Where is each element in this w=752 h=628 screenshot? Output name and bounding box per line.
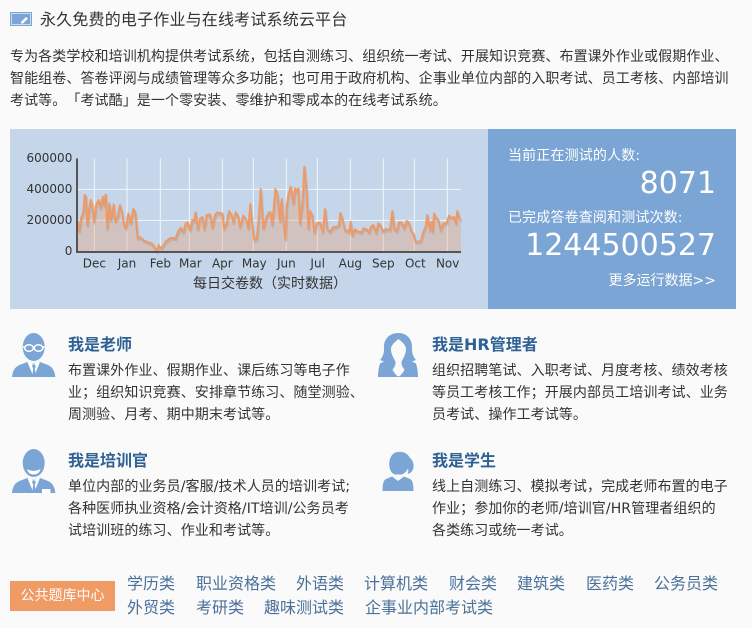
line area chart: May bbox=[242, 257, 267, 271]
category links: 职业资格类 bbox=[196, 574, 276, 593]
line area chart: Jul bbox=[309, 257, 325, 271]
line area chart: 400000 bbox=[27, 182, 72, 196]
button: public question bank: 公共题库中心 bbox=[20, 588, 104, 604]
heading: teacher: 我是老师 bbox=[68, 335, 132, 354]
category links: 外语类 bbox=[296, 574, 344, 593]
text: student description: 作业；参加你的老师/培训官/HR管理者组织的 bbox=[432, 501, 716, 517]
line area chart: 0 bbox=[65, 244, 72, 258]
icon: bearded trainer bbox=[12, 449, 56, 493]
text: trainer description bbox=[68, 478, 350, 539]
text: student description bbox=[432, 478, 728, 539]
line area chart: Mar bbox=[179, 257, 202, 271]
line area chart: Nov bbox=[436, 257, 459, 271]
panel: HR manager bbox=[378, 333, 728, 423]
line area chart: Jan bbox=[117, 257, 136, 271]
line area chart: Sep bbox=[372, 257, 395, 271]
line area chart: Dec bbox=[83, 257, 106, 271]
category links: 公务员类 bbox=[654, 574, 718, 593]
panel: trainer bbox=[12, 449, 350, 539]
panel: teacher bbox=[12, 333, 364, 423]
intro paragraph: 专为各类学校和培训机构提供考试系统，包括自测练习、组织统一考试、开展知识竞赛、布置课外作业或假期作业、 bbox=[10, 49, 729, 65]
heading: student: 我是学生 bbox=[432, 451, 496, 470]
text: teacher description: 布置课外作业、假期作业、课后练习等电子作 bbox=[68, 363, 350, 379]
category links: 医药类 bbox=[586, 574, 634, 593]
number: current testers: 8071 bbox=[640, 166, 716, 201]
text: HR description: 等员工考核工作；开展内部员工培训考试、业务 bbox=[432, 385, 728, 401]
number: completed tests: 1244500527 bbox=[525, 228, 716, 263]
intro paragraph bbox=[10, 48, 729, 109]
button: public question bank bbox=[10, 581, 115, 611]
panel: daily submissions chart bbox=[10, 129, 488, 309]
text: trainer description: 各种医师执业资格/会计资格/IT培训/公务员考 bbox=[68, 501, 349, 517]
icon: woman with long hair bbox=[378, 333, 418, 377]
heading: trainer: 我是培训官 bbox=[68, 451, 148, 470]
line area chart: 200000 bbox=[27, 213, 72, 227]
category links: 财会类 bbox=[449, 574, 497, 593]
line area chart: Oct bbox=[405, 257, 426, 271]
line area chart: Feb bbox=[150, 257, 171, 271]
icon: edit card bbox=[10, 12, 32, 26]
line area chart bbox=[27, 151, 462, 292]
category links: 计算机类 bbox=[364, 574, 428, 593]
text: HR description bbox=[432, 362, 728, 423]
category links: 建筑类 bbox=[517, 574, 565, 593]
line area chart: Jun bbox=[276, 257, 296, 271]
text: teacher description: 周测验、月考、期中期末考试等。 bbox=[68, 407, 279, 423]
line area chart: 600000 bbox=[27, 151, 72, 165]
text: teacher description: 业；组织知识竞赛、安排章节练习、随堂测验、 bbox=[68, 385, 364, 401]
text: teacher description bbox=[68, 362, 364, 423]
line area chart: 每日交卷数（实时数据） bbox=[193, 275, 347, 292]
line area chart: Aug bbox=[339, 257, 362, 271]
intro paragraph: 智能组卷、答卷评阅与成绩管理等众多功能；也可用于政府机构、企事业单位内部的入职考试、员工考核、内部培训 bbox=[10, 71, 729, 87]
text: HR description: 组织招聘笔试、入职考试、月度考核、绩效考核 bbox=[432, 363, 728, 379]
category links: 考研类 bbox=[196, 598, 244, 617]
text: trainer description: 单位内部的业务员/客服/技术人员的培训考试; bbox=[68, 479, 350, 495]
icon: girl with ponytail bbox=[382, 452, 414, 491]
category links: 学历类 bbox=[127, 574, 175, 593]
category links: 企事业内部考试类 bbox=[365, 598, 493, 617]
icon: teacher with glasses bbox=[12, 333, 56, 377]
title: 永久免费的电子作业与在线考试系统云平台 bbox=[40, 10, 347, 29]
category links bbox=[127, 574, 718, 617]
panel: live statistics bbox=[488, 129, 736, 309]
label: current testers: 当前正在测试的人数: bbox=[508, 148, 640, 164]
text: student description: 各类练习或统一考试。 bbox=[432, 523, 573, 539]
intro paragraph: 考试等。「考试酷」是一个零安装、零维护和零成本的在线考试系统。 bbox=[10, 93, 447, 109]
panel: student bbox=[382, 451, 728, 539]
category links: 外贸类 bbox=[127, 598, 175, 617]
text: trainer description: 试培训班的练习、作业和考试等。 bbox=[68, 523, 279, 539]
heading: HR: 我是HR管理者 bbox=[432, 335, 538, 354]
label: completed tests: 已完成答卷查阅和测试次数: bbox=[508, 210, 683, 226]
line area chart: Apr bbox=[212, 257, 233, 271]
category links: 趣味测试类 bbox=[264, 598, 344, 617]
text: student description: 线上自测练习、模拟考试，完成老师布置的电子 bbox=[432, 479, 728, 495]
header: title with icon bbox=[10, 10, 347, 29]
link: more data: 更多运行数据>> bbox=[609, 273, 716, 289]
text: HR description: 员考试、操作工考试等。 bbox=[432, 407, 587, 423]
